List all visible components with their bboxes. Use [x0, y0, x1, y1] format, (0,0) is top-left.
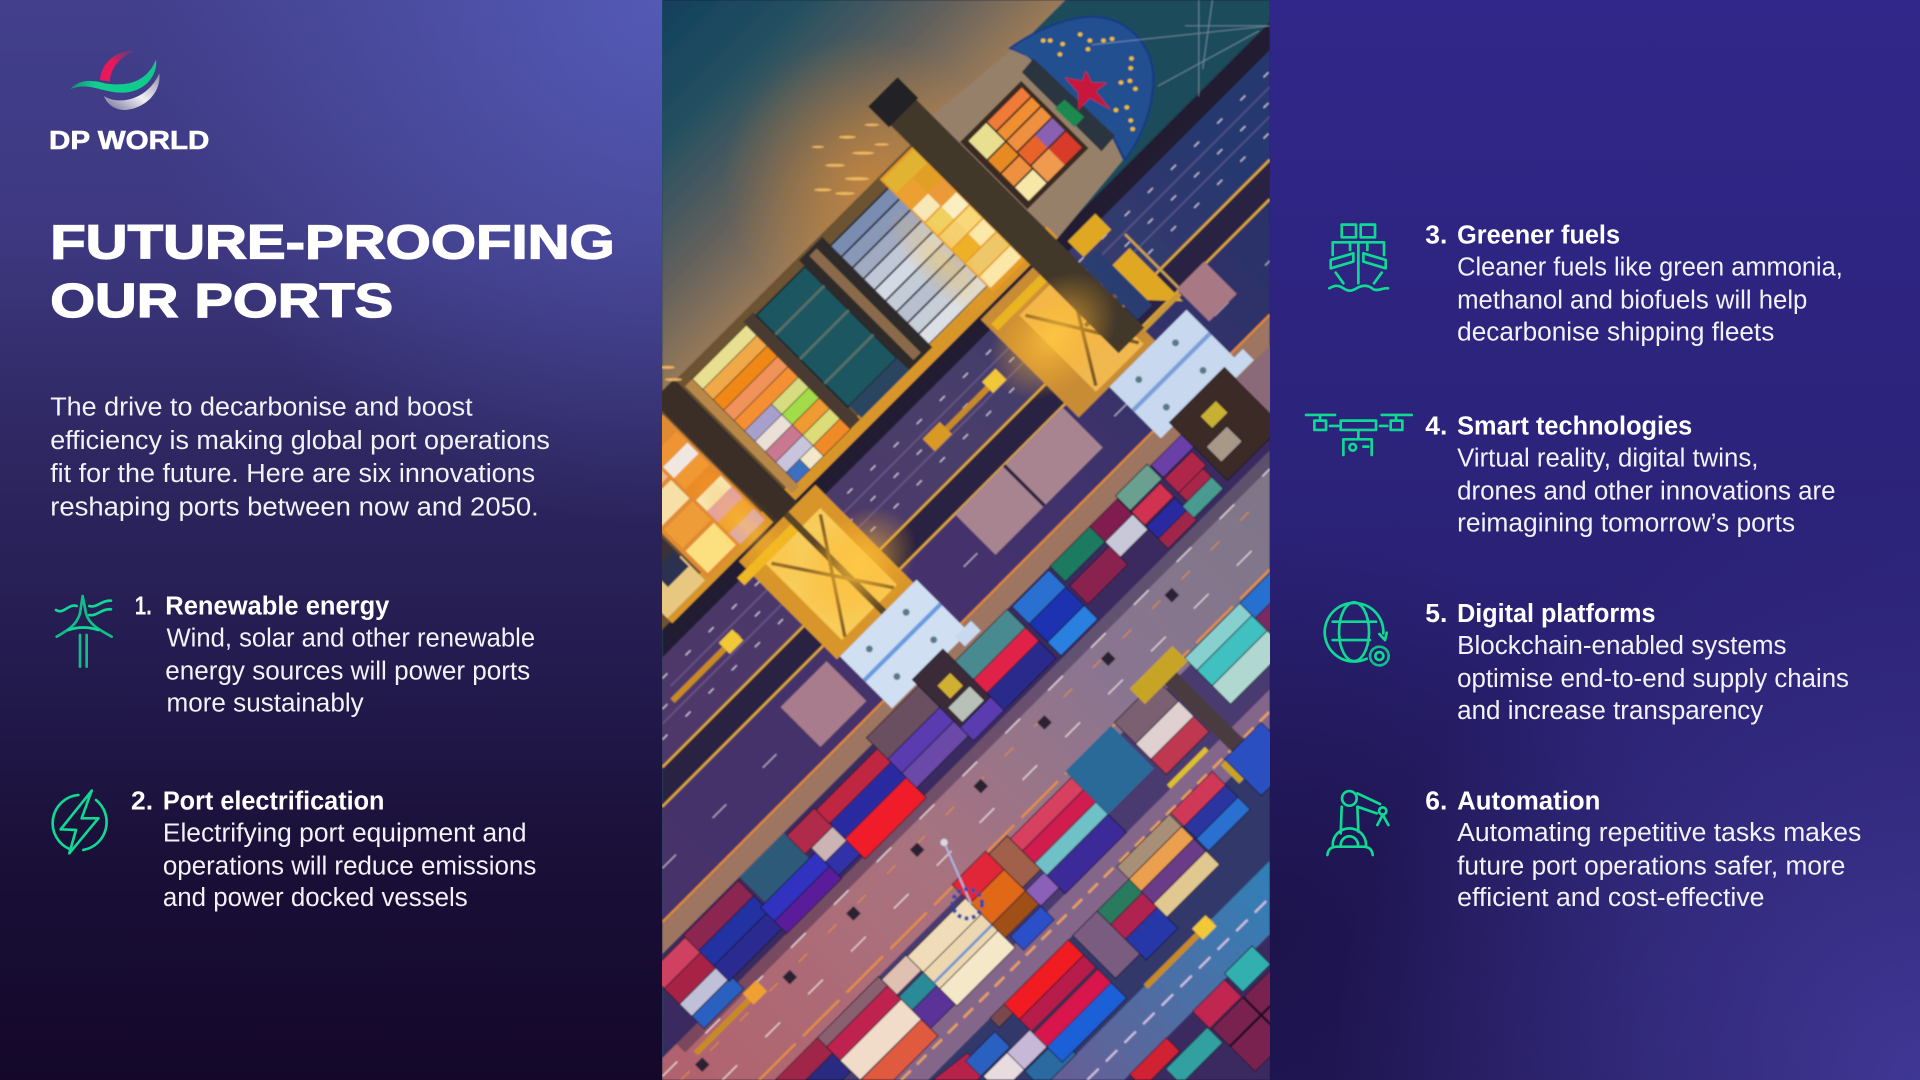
item 1: renewable energy [135, 591, 535, 717]
item 4: smart technologies: Smart technologies [1457, 411, 1692, 441]
item 5: digital platforms: and increase transparency [1457, 695, 1764, 725]
icon: lightning bolt in circle [53, 791, 107, 853]
title: FUTURE-PROOFING [50, 216, 615, 269]
logo wordmark: DP WORLD [49, 127, 209, 155]
title: OUR PORTS [50, 275, 393, 328]
icon: container ship [1329, 225, 1388, 291]
item 4: smart technologies: 4. [1425, 411, 1447, 441]
icon: drone [1306, 415, 1412, 455]
item 6: automation: Automating repetitive tasks makes [1457, 817, 1861, 847]
item 2: port electrification: Port electrification [163, 785, 384, 815]
photo: ship bow and deck [930, 0, 1270, 239]
photo: upper crane boom [890, 99, 1145, 354]
photo: road markings [662, 71, 1270, 1080]
item 6: automation [1425, 785, 1861, 912]
item 2: port electrification: operations will reduce emissions [163, 850, 536, 880]
item 5: digital platforms [1425, 598, 1849, 725]
item 6: automation: future port operations safer, more [1457, 850, 1845, 880]
photo: dark teal hold [756, 266, 909, 419]
item 2: port electrification: 2. [131, 785, 153, 815]
photo: orange container block on bow [960, 81, 1089, 209]
item 6: automation: 6. [1425, 785, 1447, 815]
photo: container blocks on ship [662, 77, 1184, 660]
item 5: digital platforms: optimise end-to-end supply chains [1457, 663, 1849, 693]
intro text: The drive to decarbonise and boost [50, 392, 473, 422]
icon: globe with gear [1325, 602, 1389, 665]
item 3: greener fuels: Cleaner fuels like green ammonia, [1457, 252, 1843, 282]
intro text: fit for the future. Here are six innovations [50, 458, 535, 488]
photo: container row one [662, 345, 1270, 1030]
item 1: renewable energy: Wind, solar and other renewable [167, 623, 535, 653]
icon: wind turbine [56, 596, 112, 667]
item 3: greener fuels: decarbonise shipping fleets [1457, 316, 1774, 346]
item 3: greener fuels [1425, 220, 1843, 346]
item 3: greener fuels: 3. [1425, 220, 1447, 250]
intro text [50, 392, 550, 522]
photo: white warehouse roofs [840, 301, 1254, 715]
item 3: greener fuels: methanol and biofuels will help [1457, 285, 1807, 315]
panel: aerial photo of container port [662, 0, 1270, 1080]
item 2: port electrification: and power docked vessels [163, 882, 468, 912]
item 6: automation: efficient and cost-effective [1457, 882, 1764, 912]
item 3: greener fuels: Greener fuels [1457, 220, 1620, 250]
photo: container row two [774, 572, 1270, 1080]
photo: pink pads [770, 261, 1255, 747]
item 4: smart technologies: reimagining tomorrow’s ports [1457, 507, 1795, 537]
item 5: digital platforms: 5. [1425, 598, 1447, 628]
title [50, 216, 615, 328]
photo: multicolour container block [692, 325, 850, 483]
logo mark [70, 51, 160, 110]
item 4: smart technologies: drones and other innovations are [1457, 476, 1836, 506]
item 1: renewable energy: more sustainably [167, 687, 365, 717]
item 4: smart technologies: Virtual reality, digital twins, [1457, 443, 1758, 473]
photo: road vehicles [667, 367, 1217, 1058]
photo: water [661, 0, 1270, 1080]
photo: small gantry on lane [1129, 646, 1245, 784]
item 1: renewable energy: 1. [135, 591, 152, 621]
intro text: efficiency is making global port operations [50, 425, 550, 455]
photo: container row three [932, 722, 1270, 1080]
item 5: digital platforms: Digital platforms [1457, 598, 1656, 628]
item 2: port electrification: Electrifying port equipment and [163, 818, 527, 848]
panel: left background [0, 0, 662, 1080]
item 5: digital platforms: Blockchain-enabled systems [1457, 630, 1787, 660]
photo: container row four [1128, 945, 1270, 1080]
photo: yellow gantry cranes [730, 204, 1196, 670]
panel: right background [1270, 0, 1920, 1080]
item 2: port electrification [131, 785, 536, 912]
photo: quay, roads and lanes [662, 22, 1270, 1080]
item 1: renewable energy: energy sources will power ports [165, 655, 530, 685]
photo: grey-white container block [830, 187, 987, 344]
photo: yellow container block [880, 147, 1026, 293]
intro text: reshaping ports between now and 2050. [50, 492, 539, 522]
item 4: smart technologies [1425, 411, 1836, 537]
logo: DP World [49, 51, 209, 155]
photo: warm light glows and water reflections [660, 124, 1141, 648]
photo: lane shadow, bollard squares and ship hull base [662, 144, 1270, 1072]
item 1: renewable energy: Renewable energy [165, 591, 390, 621]
photo: lighting pole [940, 839, 982, 918]
item 6: automation: Automation [1457, 785, 1600, 815]
photo: lower crane boom [662, 380, 797, 524]
icon: robotic arm [1327, 791, 1388, 855]
